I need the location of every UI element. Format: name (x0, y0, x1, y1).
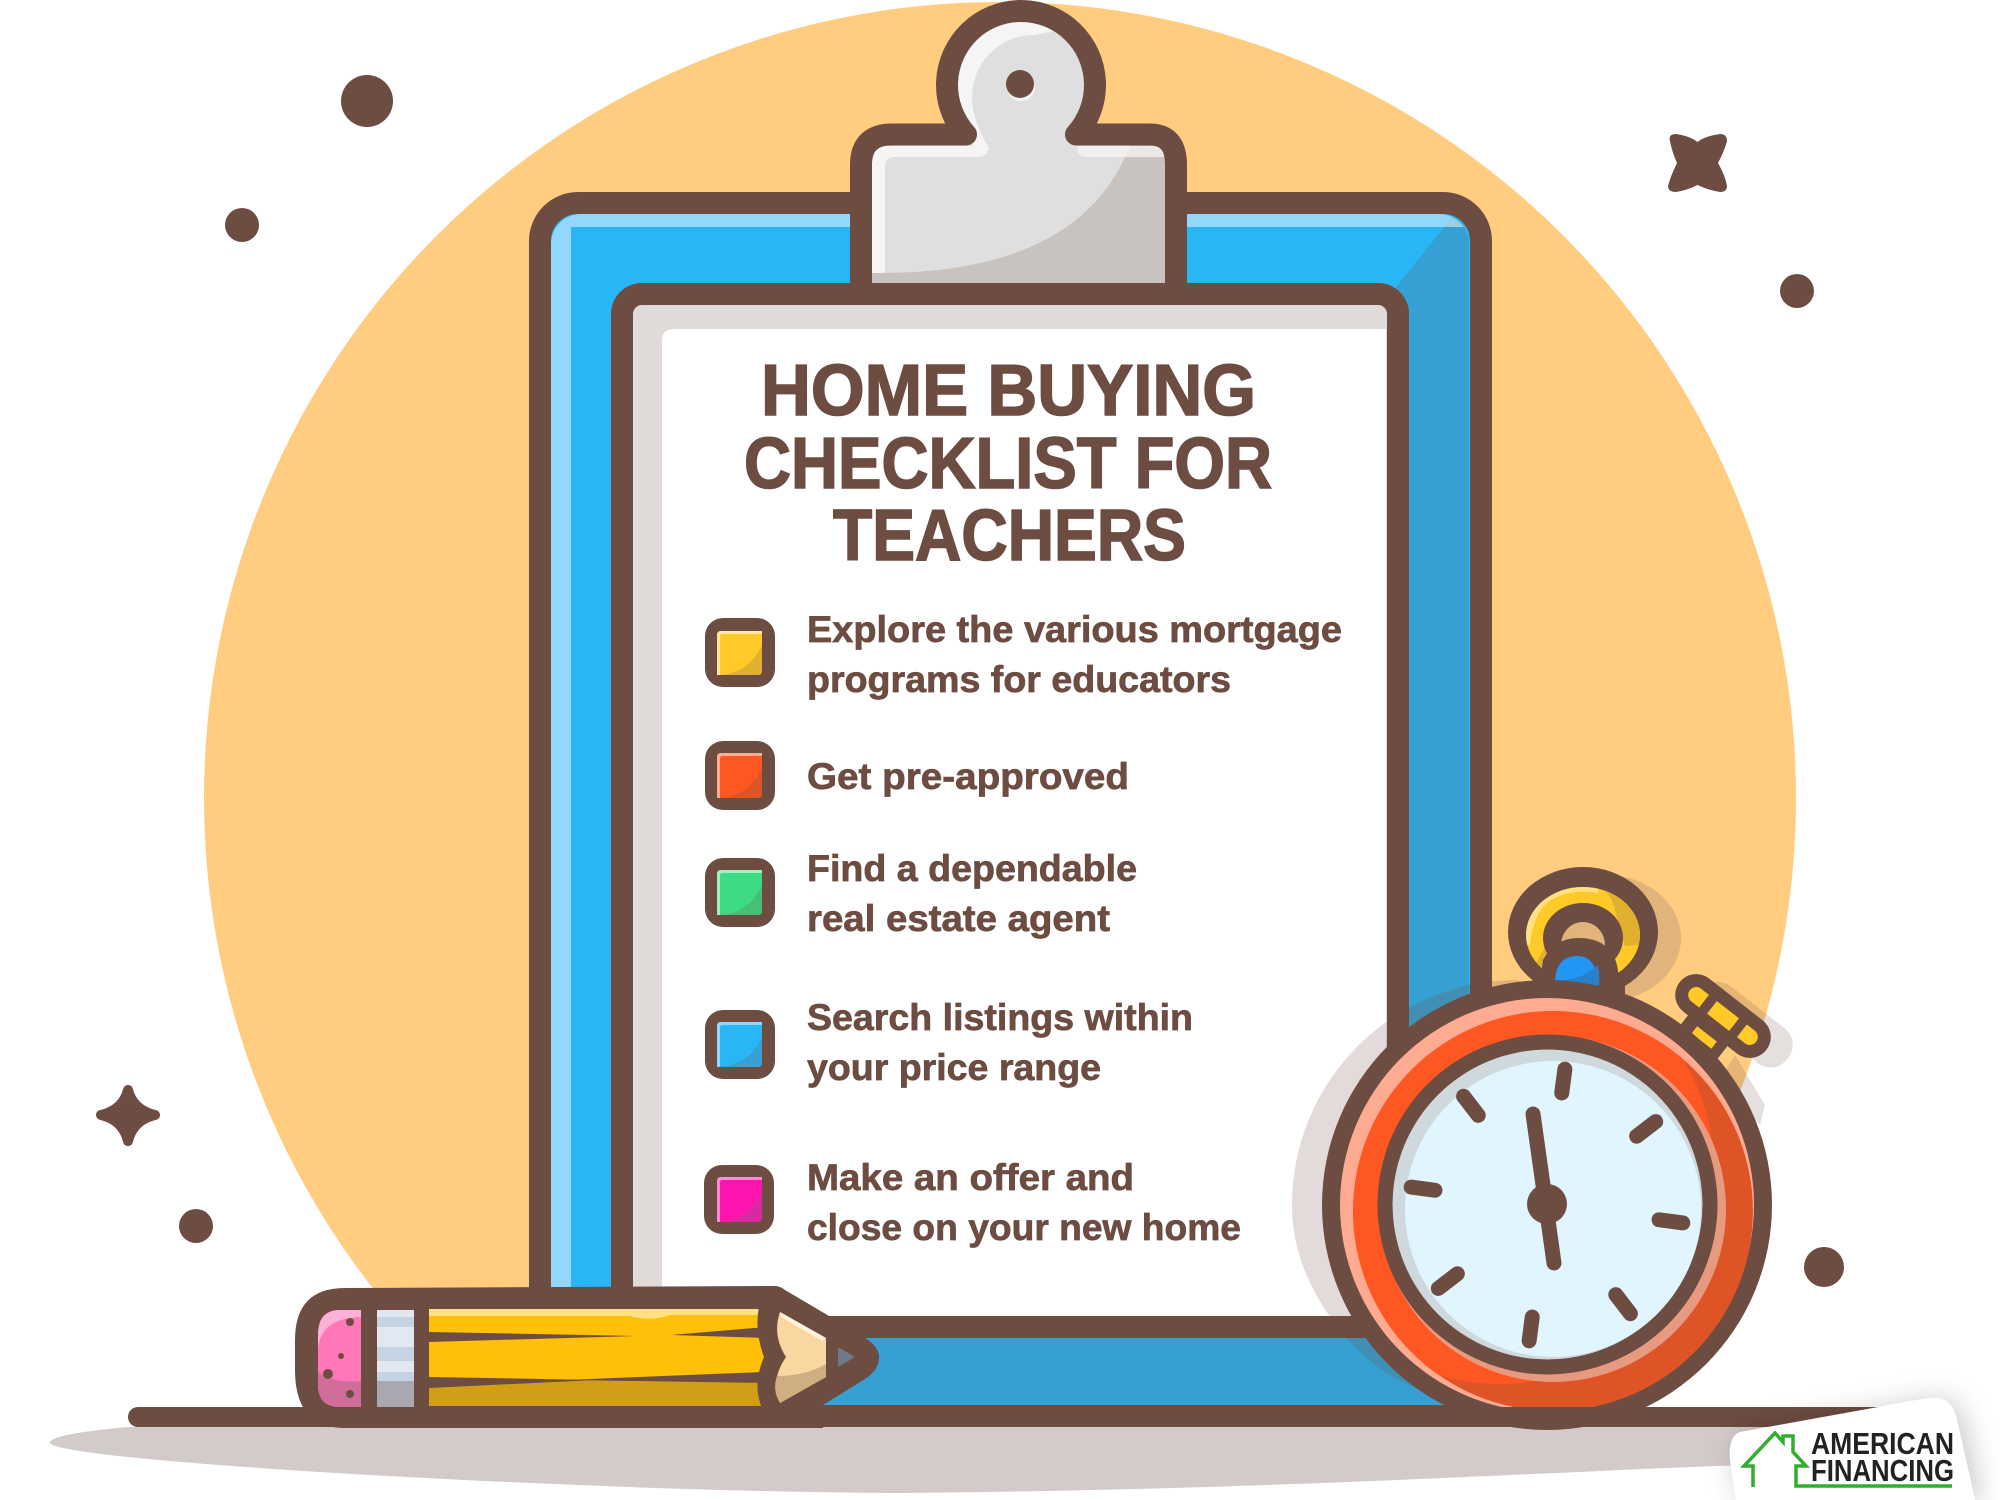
item 1: mortgage programs: programs for educators (807, 659, 1231, 700)
button shadow (1687, 974, 1801, 1125)
dot: lower left (179, 1209, 213, 1243)
item 4: search listings: Search listings within (807, 997, 1193, 1038)
title: HOME BUYING (761, 351, 1256, 431)
title: TEACHERS (833, 496, 1186, 576)
item 4: search listings: your price range (807, 1047, 1101, 1088)
star: left (101, 1090, 155, 1141)
item 4: search listings (705, 997, 1193, 1088)
checklist (704, 609, 1342, 1248)
stopwatch (1286, 867, 1801, 1430)
item 2: pre-approved (705, 741, 1129, 810)
item 1: mortgage programs (705, 609, 1342, 700)
item 3: real estate agent: real estate agent (807, 898, 1110, 939)
item 5: offer and close: close on your new home (807, 1207, 1241, 1248)
title (744, 351, 1272, 576)
crown stem (1538, 938, 1622, 995)
stopwatch shadow (1292, 980, 1671, 1407)
clip hole (1007, 73, 1035, 101)
dot: lower right (1804, 1247, 1844, 1287)
case inner rim (1380, 1036, 1726, 1382)
paper sheet (622, 294, 1398, 1327)
pencil (295, 1286, 879, 1428)
graphite tip (838, 1347, 855, 1367)
hand (1527, 1114, 1567, 1263)
board dark shade (823, 217, 1469, 1405)
crown shadow (1531, 875, 1681, 1001)
shelf line over stopwatch edge (1400, 1407, 1840, 1427)
crown ring (1508, 867, 1658, 997)
item 1: mortgage programs: Explore the various mortgage (807, 609, 1342, 650)
dot: top right (1780, 274, 1814, 308)
pencil body (429, 1309, 772, 1406)
clipboard board (540, 203, 1481, 1416)
shelf line (128, 1407, 1888, 1427)
item 3: real estate agent: Find a dependable (807, 848, 1137, 889)
case (1322, 980, 1772, 1430)
eraser (318, 1310, 362, 1408)
logo house (1744, 1433, 1952, 1487)
dot: top left small (225, 208, 259, 242)
ticks (1411, 1069, 1683, 1341)
board light edge (551, 214, 1452, 1287)
side button (1640, 966, 1779, 1101)
pencil outline (295, 1286, 879, 1428)
decorative dots and stars (101, 75, 1844, 1287)
item 5: offer and close (704, 1157, 1241, 1248)
clip shade (872, 146, 1165, 283)
item 3: real estate agent (705, 848, 1137, 939)
item 2: pre-approved: Get pre-approved (807, 756, 1129, 797)
watch face (1392, 1050, 1702, 1360)
item 5: offer and close: Make an offer and (807, 1157, 1134, 1198)
wood tip (757, 1295, 826, 1408)
logo text (1811, 1426, 1954, 1488)
logo text: AMERICAN (1811, 1426, 1954, 1461)
logo text: FINANCING (1811, 1453, 1954, 1488)
clipboard clip (861, 11, 1180, 290)
ferrule (377, 1310, 414, 1407)
title: CHECKLIST FOR (744, 424, 1272, 504)
logo card (1730, 1398, 1975, 1500)
clip highlights (871, 146, 987, 285)
star: top right (1668, 134, 1727, 192)
ground shadow (50, 1427, 1800, 1493)
background peach circle (204, 2, 1796, 1410)
dot: top left large (341, 75, 393, 127)
